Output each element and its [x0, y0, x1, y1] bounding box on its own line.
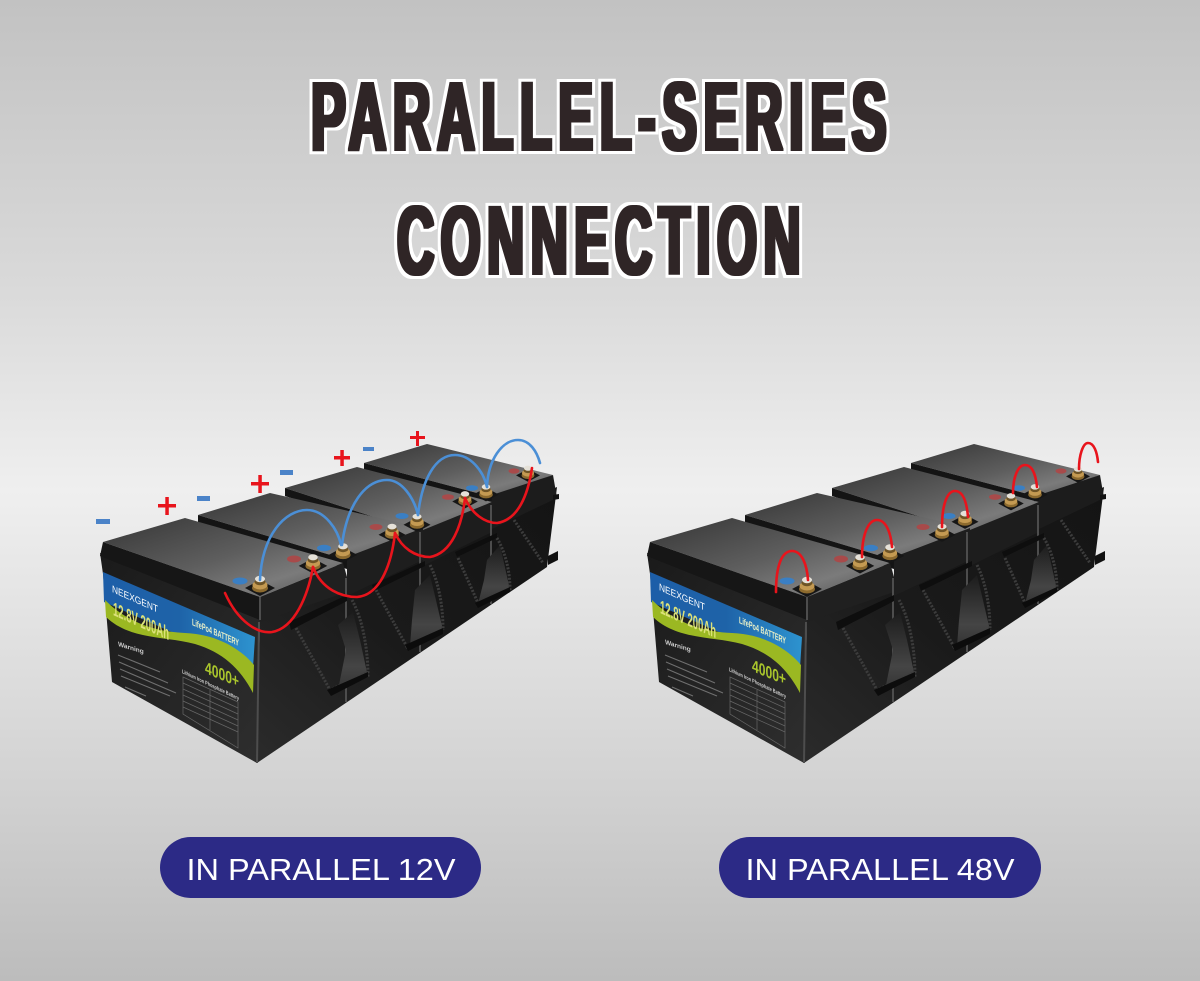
battery label text: NEEXGENT — [112, 584, 158, 616]
battery label text: 4000+ — [752, 656, 786, 689]
red cables — [776, 443, 1098, 592]
title — [311, 62, 893, 295]
battery bank — [647, 444, 1106, 763]
diagram: 48V battery bank — [647, 443, 1106, 763]
battery label text: 12.8V 200Ah — [113, 599, 169, 645]
diagram: 12V battery bank — [96, 431, 559, 763]
title line 2: CONNECTION — [397, 186, 807, 295]
battery label text: Warning — [665, 639, 691, 654]
red cables — [225, 468, 532, 632]
battery label text: 12.8V 200Ah — [660, 597, 716, 643]
battery label text — [112, 584, 240, 702]
battery label text: Lithium Iron Phosphate Battery — [182, 669, 240, 702]
badge: in parallel 12V — [160, 837, 481, 898]
battery label text — [659, 582, 787, 700]
terminals — [792, 467, 1090, 597]
badge: in parallel 48V: IN PARALLEL 48V — [746, 852, 1015, 887]
battery label text: Lithium Iron Phosphate Battery — [729, 667, 787, 700]
battery label text: Warning — [118, 641, 144, 656]
battery bank — [100, 444, 559, 763]
blue cables — [260, 440, 540, 580]
battery label text: LifePo4 BATTERY — [192, 617, 239, 649]
badge: in parallel 48V — [719, 837, 1041, 898]
badge: in parallel 12V: IN PARALLEL 12V — [186, 852, 456, 887]
polarity symbols — [96, 431, 425, 524]
terminals — [245, 466, 540, 596]
battery label text: 4000+ — [205, 658, 239, 691]
battery label text: NEEXGENT — [659, 582, 705, 614]
battery label text: LifePo4 BATTERY — [739, 615, 786, 647]
